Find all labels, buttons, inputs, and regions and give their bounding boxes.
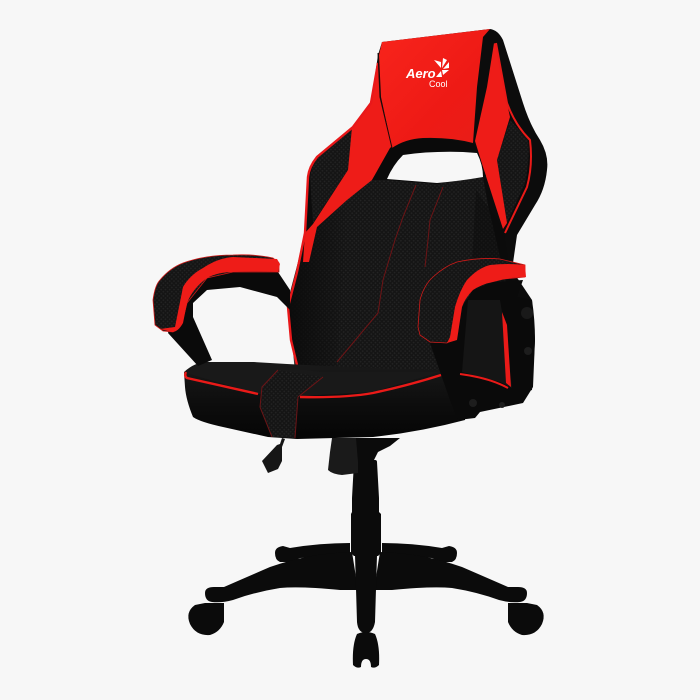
right red wing bbox=[475, 43, 510, 229]
back silhouette bbox=[288, 29, 547, 400]
right mesh bolster bbox=[497, 120, 529, 223]
head opening bbox=[387, 152, 483, 183]
frame bolts bbox=[469, 347, 532, 408]
left mesh bolster bbox=[310, 128, 352, 223]
head left seam bbox=[378, 53, 392, 148]
left arm red strip bbox=[160, 257, 280, 332]
right side shade bbox=[465, 190, 515, 395]
right caster bbox=[508, 603, 544, 635]
seat piping left bbox=[185, 372, 258, 394]
right armrest bbox=[418, 258, 535, 420]
seat and red piping bbox=[184, 185, 470, 439]
center front leg bbox=[355, 555, 377, 633]
back stitching right bbox=[425, 187, 443, 267]
chair back bbox=[288, 29, 547, 400]
right red strip bbox=[502, 312, 511, 387]
seat top surface bbox=[186, 362, 440, 396]
seat strip stitching bbox=[260, 370, 323, 438]
arm pivot knob bbox=[521, 307, 533, 319]
back stitching left bbox=[337, 185, 416, 362]
chair base bbox=[188, 438, 544, 668]
right arm pad bbox=[418, 258, 525, 343]
left arm support bbox=[168, 262, 290, 366]
logo wordmark Aero: Aero bbox=[405, 66, 436, 81]
right red piping bbox=[496, 43, 531, 233]
seat cushion bbox=[184, 362, 470, 439]
seat piping right bbox=[300, 375, 441, 397]
left armrest bbox=[153, 255, 290, 366]
left red wing bbox=[303, 62, 392, 262]
tilt knob bbox=[262, 438, 285, 473]
logo star icon bbox=[434, 58, 449, 77]
gas lift column bbox=[351, 460, 381, 556]
left red piping bbox=[288, 63, 378, 365]
mechanism bracket bbox=[356, 438, 400, 462]
right front leg bbox=[374, 552, 527, 602]
rear star legs bbox=[275, 543, 457, 562]
head frame bbox=[372, 139, 486, 184]
left side shade bbox=[289, 198, 347, 385]
logo wordmark Cool: Cool bbox=[429, 79, 448, 89]
stitching bbox=[260, 185, 443, 438]
left front leg bbox=[205, 552, 358, 602]
carbon seat strip bbox=[260, 370, 323, 438]
front caster bbox=[353, 632, 379, 668]
right frame inner panel bbox=[462, 300, 512, 388]
left caster bbox=[188, 603, 224, 635]
logo bbox=[405, 58, 449, 89]
right arm red strip bbox=[447, 264, 526, 343]
red headrest bbox=[379, 29, 490, 148]
rear seat piping bbox=[460, 374, 508, 388]
right arm support frame bbox=[430, 280, 535, 420]
center back panel bbox=[290, 177, 510, 395]
tension cylinder bbox=[328, 438, 358, 475]
left arm pad bbox=[153, 255, 279, 332]
